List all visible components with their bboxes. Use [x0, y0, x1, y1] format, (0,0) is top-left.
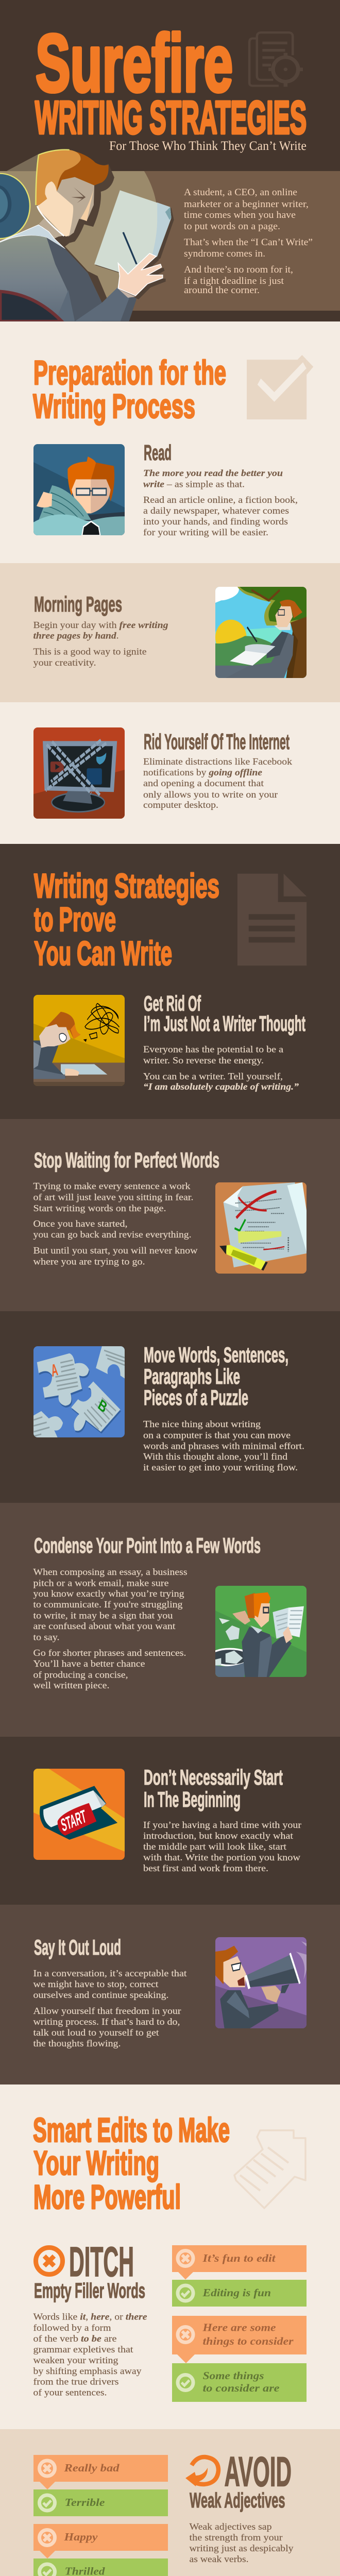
- text block: introduction, but know exactly what: [143, 1831, 293, 1841]
- text block: to communicate. If you're struggling: [33, 1599, 183, 1609]
- illustration: man reading a book: [33, 444, 125, 536]
- heading: smart edits: More Powerful: [33, 2178, 181, 2216]
- text block: [143, 468, 298, 537]
- text block: and opening a document that: [143, 778, 264, 788]
- intro paragraph: syndrome comes in.: [184, 248, 265, 259]
- text block: of your sentences.: [33, 2387, 107, 2398]
- illustration: puzzle pieces: [33, 1346, 125, 1437]
- heading: preparation: Writing Process: [33, 387, 195, 425]
- text block: writing process. If that’s hard to do,: [33, 2016, 180, 2027]
- text block: it easier to get into your writing flow.: [143, 1462, 298, 1472]
- text block: Allow yourself that freedom in your: [33, 2006, 181, 2016]
- illustration: man with megaphone: [215, 1937, 307, 2029]
- text block: [143, 1044, 299, 1092]
- text block: Eliminate distractions like Facebook: [143, 756, 292, 767]
- heading: Empty Filler Words: [34, 2279, 145, 2302]
- example: it's fun to edit: Editing is fun: [202, 2286, 271, 2299]
- text block: Start writing words on the page.: [33, 1203, 166, 1213]
- heading: preparation: Preparation for the: [33, 353, 226, 392]
- heading: Get Rid Of: [144, 991, 201, 1015]
- panel: rid yourself of the internet: [33, 727, 292, 819]
- illustration: man tossing papers: [209, 1586, 307, 1677]
- example: here are some things: Some things: [203, 2369, 264, 2382]
- intro paragraph: to put words on a page.: [184, 221, 280, 232]
- text block: words and phrases with minimal effort.: [143, 1440, 304, 1451]
- panel: avoid: [33, 2448, 295, 2576]
- heading: smart edits: Your Writing: [33, 2144, 159, 2182]
- text block: “I am absolutely capable of writing.”: [143, 1081, 299, 1092]
- text block: [143, 756, 292, 810]
- panel: don't necessarily start: [33, 1765, 301, 1873]
- text block: computer desktop.: [143, 800, 218, 810]
- illustration: marked up page: [215, 1182, 307, 1274]
- text block: talk out loud to yourself to get: [33, 2027, 159, 2038]
- text block: Once you have started,: [33, 1218, 128, 1229]
- text block: of art will just leave you sitting in fear.: [33, 1192, 194, 1202]
- heading: writing strategies: [34, 867, 219, 972]
- heading: writing strategies: You Can Write: [34, 934, 172, 972]
- text block: for your writing will be easier.: [143, 527, 268, 537]
- text block: well written piece.: [33, 1680, 109, 1690]
- heading: [144, 991, 305, 1036]
- text block: The more you read the better you: [143, 468, 283, 478]
- intro paragraph: if a tight deadline is just: [184, 276, 284, 286]
- intro paragraph: That’s when the “I Can’t Write”: [184, 237, 313, 248]
- example: it's fun to edit: [172, 2245, 307, 2307]
- example: really bad: [33, 2455, 168, 2516]
- text block: If you’re having a hard time with your: [143, 1820, 301, 1830]
- text block: are confused about what you want: [33, 1621, 176, 1631]
- panel: move words: [33, 1343, 304, 1472]
- hero illustration: writer at desk: [0, 150, 174, 321]
- text block: the strength from your: [190, 2532, 283, 2543]
- intro paragraph: around the corner.: [184, 285, 260, 296]
- example: it's fun to edit: It’s fun to edit: [202, 2252, 276, 2264]
- text block: as weak verbs.: [190, 2554, 248, 2564]
- panel: ditch: [33, 2239, 307, 2402]
- heading: preparation: [33, 353, 226, 425]
- example: happy: [33, 2524, 168, 2576]
- text block: you can go back and revise everything.: [33, 1229, 192, 1240]
- intro paragraph: [184, 187, 313, 296]
- text block: a daily newspaper, whatever comes: [143, 505, 289, 516]
- text block: into your hands, and finding words: [143, 516, 288, 527]
- text block: of producing a concise,: [33, 1669, 128, 1680]
- example: here are some things: Here are some: [202, 2321, 276, 2334]
- text block: Read an article online, a fiction book,: [143, 495, 298, 505]
- example: really bad: Terrible: [65, 2496, 105, 2509]
- text block: [33, 1567, 188, 1690]
- text block: This is a good way to ignite: [33, 646, 147, 656]
- text block: the thoughts flowing.: [33, 2038, 121, 2048]
- heading: writing strategies: Writing Strategies: [34, 867, 219, 905]
- subtitle: For Those Who Think They Can’t Write: [109, 139, 307, 153]
- illustration: chained monitor: [33, 727, 125, 819]
- panel: say it out loud: [33, 1935, 307, 2048]
- icon: avoid arrow: [185, 2457, 218, 2486]
- text block: With this thought alone, you’ll find: [143, 1451, 287, 1462]
- panel: get rid of: [33, 991, 305, 1092]
- panel: condense: [33, 1533, 307, 1690]
- text block: to say.: [33, 1632, 60, 1642]
- icon: document with target: [249, 32, 303, 87]
- text block: of the verb to be are: [33, 2333, 117, 2344]
- text block: best first and work from there.: [143, 1863, 268, 1873]
- title: Surefire: [36, 18, 233, 109]
- text block: writer. So reverse the energy.: [143, 1055, 264, 1065]
- text block: writing just as despicably: [190, 2543, 294, 2553]
- text block: In a conversation, it’s acceptable that: [33, 1968, 187, 1978]
- heading: Say It Out Loud: [34, 1935, 121, 1959]
- text block: to write, it may be a sign that you: [33, 1611, 173, 1621]
- heading: Read: [144, 440, 172, 465]
- illustration: book with start ribbon: [33, 1769, 125, 1860]
- text block: from the true drivers: [33, 2376, 119, 2386]
- text block: weaken your writing: [33, 2355, 118, 2365]
- text block: [143, 1820, 301, 1873]
- intro paragraph: time comes when you have: [184, 210, 296, 221]
- text block: write – as simple as that.: [143, 479, 245, 489]
- icon: document: [237, 874, 307, 965]
- intro paragraph: A student, a CEO, an online: [184, 187, 297, 198]
- text block: where you are trying to go.: [33, 1256, 145, 1266]
- text block: [190, 2521, 295, 2576]
- heading: Pieces of a Puzzle: [144, 1385, 248, 1410]
- text block: The nice thing about writing: [143, 1419, 261, 1429]
- heading: writing strategies: to Prove: [34, 900, 116, 938]
- example: here are some things: things to consider: [203, 2335, 294, 2347]
- text block: the middle part will look like, start: [143, 1841, 286, 1852]
- icon: paper arrow: [234, 2130, 305, 2208]
- text block: [33, 620, 168, 668]
- heading: Paragraphs Like: [144, 1364, 240, 1388]
- heading: smart edits: [33, 2111, 230, 2216]
- text block: [33, 2311, 147, 2398]
- heading: [144, 1343, 288, 1410]
- illustration: frustrated writer: [33, 995, 125, 1087]
- text block: you know exactly what you’re trying: [33, 1588, 184, 1599]
- text block: notifications by going offline: [143, 767, 262, 777]
- text block: [33, 1181, 198, 1266]
- text block: Trying to make every sentence a work: [33, 1181, 191, 1191]
- text block: pitch or a work email, make sure: [33, 1578, 169, 1588]
- text block: [143, 1419, 304, 1472]
- text block: on a computer is that you can move: [143, 1430, 291, 1440]
- text block: three pages by hand .: [33, 631, 119, 641]
- text block: Everyone has the potential to be a: [143, 1044, 283, 1054]
- intro paragraph: marketer or a beginner writer,: [184, 199, 309, 210]
- text block: followed by a form: [33, 2323, 111, 2333]
- title: [35, 18, 307, 144]
- text block: Words like it, here, or there: [33, 2311, 147, 2321]
- intro paragraph: And there’s no room for it,: [184, 264, 293, 275]
- text block: Go for shorter phrases and sentences.: [33, 1648, 186, 1658]
- panel: morning pages: [33, 587, 307, 678]
- text block: You can be a writer. Tell yourself,: [143, 1071, 283, 1081]
- heading: Morning Pages: [34, 592, 122, 616]
- panel: stop waiting: [33, 1148, 307, 1274]
- heading: [144, 1765, 283, 1811]
- text block: You’ll have a better chance: [33, 1658, 145, 1669]
- text block: But until you start, you will never know: [33, 1245, 198, 1256]
- heading: [34, 2239, 145, 2302]
- text block: ourselves and continue speaking.: [33, 1990, 169, 2000]
- example: really bad: Really bad: [63, 2462, 120, 2474]
- text block: by shifting emphasis away: [33, 2366, 142, 2376]
- heading: In The Beginning: [144, 1787, 241, 1811]
- illustration: puzzle pieces: B: [96, 1396, 110, 1416]
- example: here are some things: to consider are: [203, 2382, 279, 2394]
- text block: When composing an essay, a business: [33, 1567, 188, 1577]
- text block: we might have to stop, correct: [33, 1979, 159, 1989]
- text block: your creativity.: [33, 657, 96, 668]
- text block: grammar expletives that: [33, 2344, 133, 2354]
- heading: [190, 2448, 292, 2512]
- text block: Begin your day with free writing: [33, 620, 168, 630]
- text block: only allows you to write on your: [143, 789, 278, 800]
- example: here are some things: [172, 2316, 307, 2402]
- illustration: man writing under tree: [215, 587, 307, 678]
- icon: ditch x: [36, 2247, 63, 2274]
- illustration: book with start ribbon: START: [59, 1806, 88, 1836]
- illustration: puzzle pieces: A: [50, 1360, 59, 1381]
- icon: checkmark box: [247, 355, 313, 419]
- example: happy: Happy: [63, 2531, 98, 2543]
- heading: DITCH: [69, 2239, 134, 2285]
- text block: with that. Write the portion you know: [143, 1852, 300, 1862]
- text block: [33, 1968, 187, 2048]
- panel: read: [33, 440, 298, 537]
- text block: Weak adjectives sap: [190, 2521, 272, 2532]
